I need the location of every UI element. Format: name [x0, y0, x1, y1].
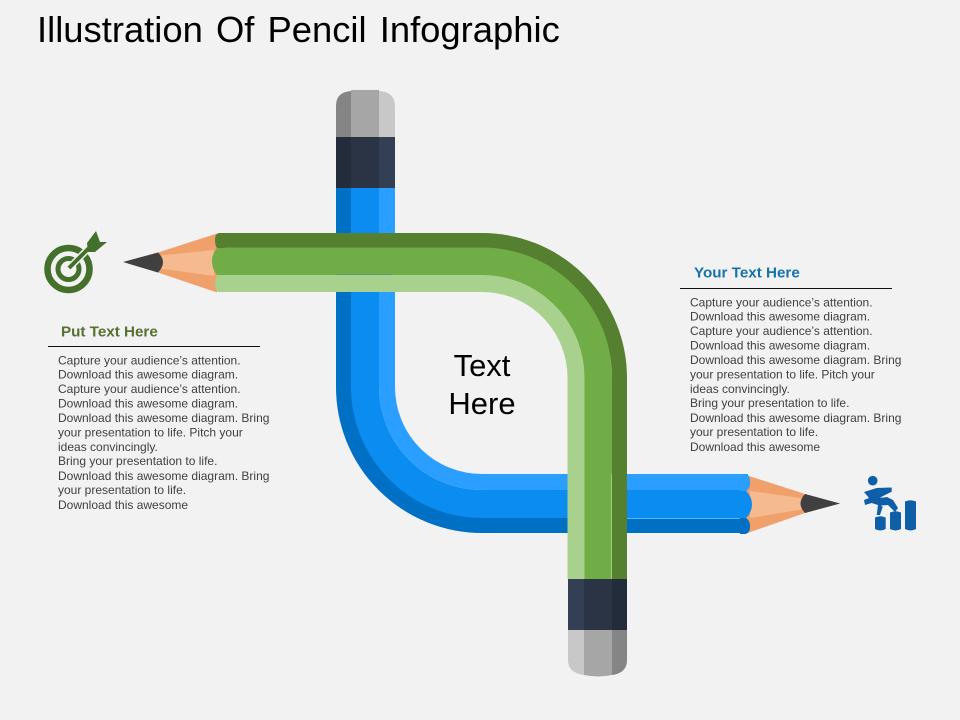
icon: target with dart	[48, 231, 107, 290]
left body text: Capture your audience’s attention.	[58, 354, 241, 368]
left body text: Download this awesome diagram. Bring	[58, 411, 269, 425]
body: blue pencil	[344, 188, 750, 525]
right body text: Download this awesome diagram. Bring	[690, 353, 901, 367]
body: green pencil	[220, 240, 620, 579]
right text block	[680, 264, 901, 454]
left heading: Put Text Here	[61, 324, 158, 340]
right body text: your presentation to life. Pitch your	[690, 368, 875, 382]
left text block	[48, 324, 269, 512]
tip: blue pencil	[740, 474, 840, 534]
left body text: your presentation to life.	[58, 483, 186, 497]
title: Illustration Of Pencil Infographic	[37, 9, 560, 50]
left body text: Download this awesome	[58, 498, 188, 512]
right body text: your presentation to life.	[690, 425, 818, 439]
center label: Here	[448, 386, 516, 421]
right body text: Download this awesome diagram.	[690, 310, 870, 324]
right body text: Capture your audience’s attention.	[690, 296, 873, 310]
left body text	[58, 354, 269, 512]
left body text: Download this awesome diagram. Bring	[58, 469, 269, 483]
right heading: Your Text Here	[694, 264, 800, 282]
right body text: Download this awesome	[690, 440, 820, 454]
left body text: Capture your audience’s attention.	[58, 382, 241, 396]
right body text: Download this awesome diagram.	[690, 338, 870, 352]
right body text: ideas convincingly.	[690, 382, 790, 396]
center label	[448, 348, 516, 421]
eraser: blue pencil	[336, 90, 395, 137]
left body text: Bring your presentation to life.	[58, 454, 217, 468]
right body text	[690, 296, 901, 454]
right body text: Download this awesome diagram. Bring	[690, 411, 901, 425]
center label: Text	[454, 348, 511, 383]
blue pencil	[336, 90, 840, 534]
left body text: ideas convincingly.	[58, 440, 158, 454]
left body text: your presentation to life. Pitch your	[58, 426, 243, 440]
green pencil	[123, 233, 627, 676]
ferrule band: blue pencil	[336, 137, 395, 188]
right body text: Capture your audience’s attention.	[690, 324, 873, 338]
tip: green pencil	[123, 233, 225, 292]
left body text: Download this awesome diagram.	[58, 396, 238, 410]
eraser: green pencil	[568, 630, 627, 676]
left body text: Download this awesome diagram.	[58, 368, 238, 382]
right body text: Bring your presentation to life.	[690, 396, 849, 410]
icon: runner climbing bars	[864, 476, 916, 530]
ferrule band: green pencil	[568, 579, 627, 630]
